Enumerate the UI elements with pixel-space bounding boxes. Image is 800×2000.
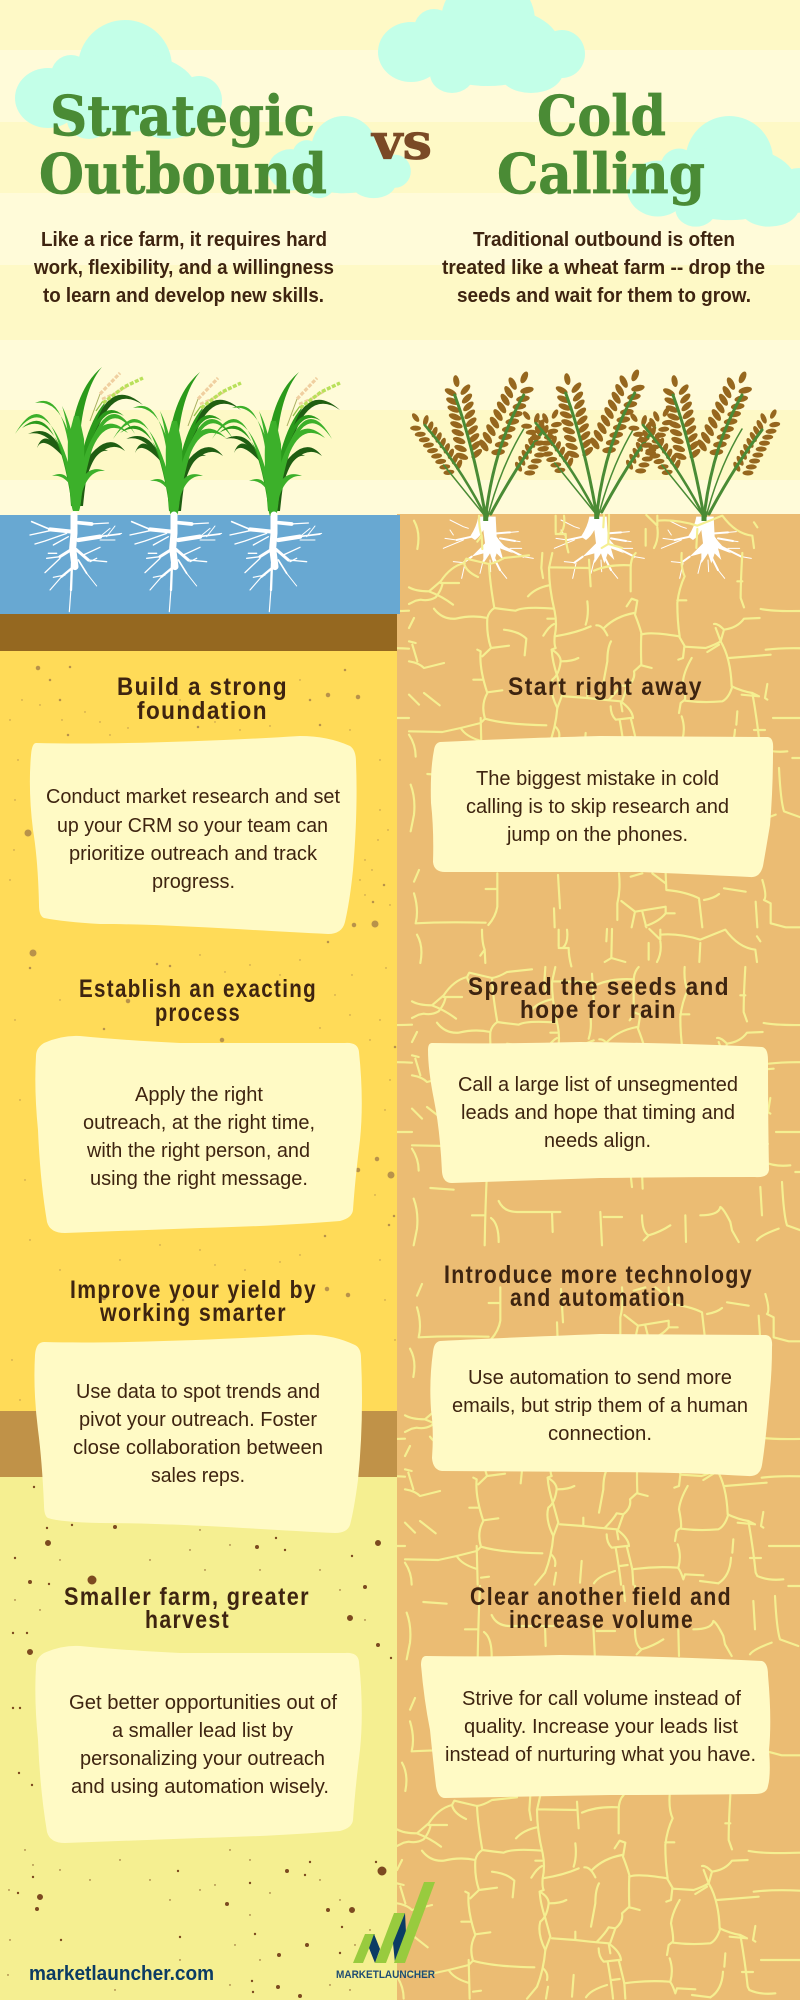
section: establish an exacting process: Apply the right <box>135 1084 263 1106</box>
section: introduce more technology: Introduce more technology <box>444 1261 753 1289</box>
intro text: strategic outbound: to learn and develop new skills. <box>43 285 324 307</box>
section: introduce more technology: and automation <box>510 1284 686 1312</box>
section: start right away: calling is to skip research and <box>466 796 729 818</box>
section: start right away: Start right away <box>508 673 703 701</box>
section: spread the seeds <box>428 973 769 1183</box>
title: Strategic Outbound: Outbound <box>39 141 327 206</box>
left column: tan band <box>0 1411 397 1477</box>
section: smaller farm, greater harvest: and using automation wisely. <box>71 1776 329 1798</box>
section: smaller farm, greater harvest: Smaller farm, greater <box>64 1583 310 1611</box>
section: improve your yield <box>34 1276 362 1533</box>
intro text: strategic outbound <box>33 229 334 307</box>
section: improve your yield: working smarter <box>99 1299 287 1327</box>
section: clear another field: Clear another field and <box>470 1583 732 1611</box>
section: improve your yield: sales reps. <box>151 1465 245 1487</box>
section: smaller farm, greater harvest: personalizing your outreach <box>80 1748 325 1770</box>
section: establish an exacting process <box>35 975 362 1233</box>
section: start right away: jump on the phones. <box>506 824 688 846</box>
wheat roots <box>443 517 751 578</box>
section: smaller farm, greater harvest: Get better opportunities out of <box>69 1692 337 1714</box>
section: introduce more technology <box>430 1261 772 1476</box>
section: build a strong foundation: Build a strong <box>117 673 288 701</box>
section: establish an exacting process: with the right person, and <box>86 1140 310 1162</box>
title: Cold Calling <box>497 83 705 206</box>
left column: brown soil <box>0 614 397 651</box>
section: establish an exacting process: Establish an exacting <box>79 975 317 1003</box>
section: spread the seeds: hope for rain <box>520 996 677 1024</box>
left column: yellow soil <box>0 651 397 1411</box>
soil specks on yellow <box>10 667 395 1400</box>
rice roots <box>30 515 322 612</box>
section: smaller farm, greater harvest <box>35 1583 362 1843</box>
section: build a strong foundation: up your CRM so your team can <box>57 815 328 837</box>
intro text: cold calling: Traditional outbound is often <box>473 229 735 251</box>
intro text: strategic outbound: Like a rice farm, it requires hard <box>41 229 327 251</box>
section: smaller farm, greater harvest: a smaller lead list by <box>112 1720 293 1742</box>
intro text: cold calling: seeds and wait for them to grow. <box>457 285 751 307</box>
section: spread the seeds: leads and hope that timing and <box>461 1102 735 1124</box>
section: introduce more technology: emails, but strip them of a human <box>452 1395 748 1417</box>
section: improve your yield: close collaboration between <box>73 1437 323 1459</box>
section: clear another field: Strive for call volume instead of <box>462 1688 741 1710</box>
section: establish an exacting process: outreach, at the right time, <box>83 1112 315 1134</box>
section: introduce more technology: connection. <box>548 1423 652 1445</box>
section: clear another field: quality. Increase your leads list <box>464 1716 738 1738</box>
vs label: vs <box>371 112 432 171</box>
right column: dry soil <box>397 514 800 2000</box>
section: establish an exacting process: using the right message. <box>90 1168 308 1190</box>
intro text: cold calling: treated like a wheat farm -- drop the <box>442 257 765 279</box>
title: Cold Calling: Cold <box>537 83 666 148</box>
section: start right away <box>431 673 773 877</box>
cracked soil pattern <box>397 514 800 2000</box>
section: clear another field: increase volume <box>509 1606 694 1634</box>
marketlauncher logo <box>336 1882 435 1981</box>
wheat plants <box>403 363 787 521</box>
section: start right away: The biggest mistake in cold <box>476 768 719 790</box>
intro text: strategic outbound: work, flexibility, and a willingness <box>33 257 334 279</box>
section: introduce more technology: Use automation to send more <box>468 1367 732 1389</box>
section: smaller farm, greater harvest: harvest <box>145 1606 230 1634</box>
left column: pale soil <box>0 1477 397 2000</box>
section: improve your yield: Use data to spot trends and <box>76 1381 320 1403</box>
rice plants <box>15 367 340 516</box>
title: Strategic Outbound: Strategic <box>50 83 315 148</box>
title: Cold Calling: Calling <box>497 141 705 206</box>
section: improve your yield: Improve your yield by <box>70 1276 317 1304</box>
section: spread the seeds: needs align. <box>544 1130 651 1152</box>
section: improve your yield: pivot your outreach. Foster <box>79 1409 317 1431</box>
section: clear another field: instead of nurturing what you have. <box>445 1744 756 1766</box>
section: clear another field <box>421 1583 770 1798</box>
section: build a strong foundation: prioritize outreach and track <box>69 843 318 865</box>
section: spread the seeds: Spread the seeds and <box>468 973 730 1001</box>
section: build a strong foundation <box>30 673 357 934</box>
marketlauncher logo: MARKETLAUNCHER <box>336 1969 435 1981</box>
section: build a strong foundation: foundation <box>137 697 268 725</box>
title: Strategic Outbound <box>39 83 327 206</box>
clouds <box>15 0 800 227</box>
intro text: cold calling <box>442 229 765 307</box>
sky background stripes <box>0 0 800 515</box>
left column: water <box>0 515 400 614</box>
section: build a strong foundation: progress. <box>152 871 235 893</box>
section: build a strong foundation: Conduct market research and set <box>46 786 340 808</box>
section: establish an exacting process: process <box>155 999 241 1027</box>
website url: marketlauncher.com <box>29 1963 214 1985</box>
soil specks on pale ground <box>8 1487 391 1996</box>
section: spread the seeds: Call a large list of unsegmented <box>458 1074 738 1096</box>
